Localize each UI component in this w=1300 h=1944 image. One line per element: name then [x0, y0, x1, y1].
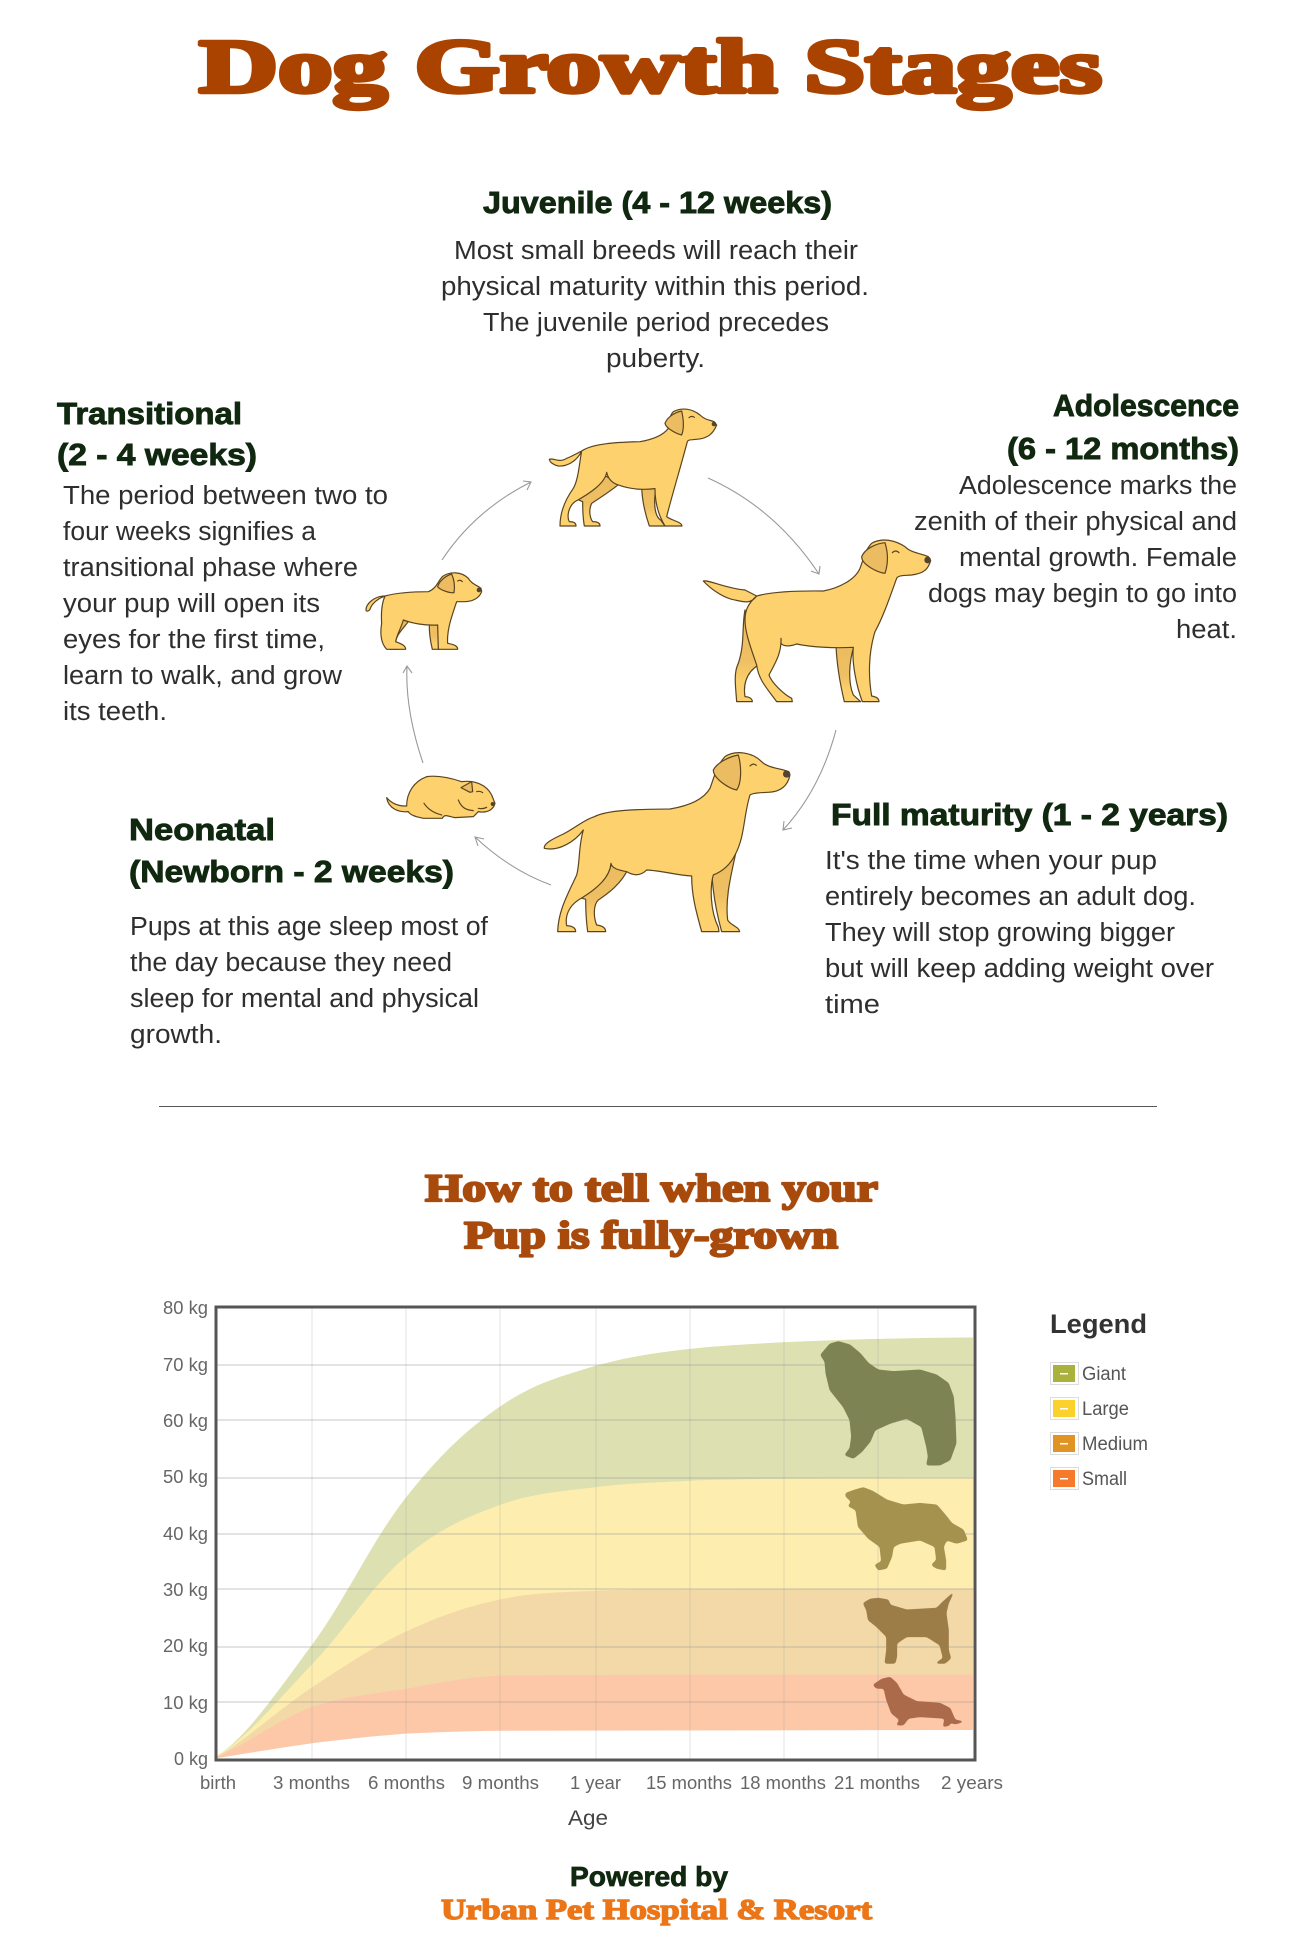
heading: transitional: Transitional — [57, 396, 242, 431]
text block: adolescence description: mental growth. Female — [959, 544, 1237, 572]
text block: juvenile description: physical maturity within this period. — [441, 273, 869, 301]
arrow: neonatal to transitional — [403, 666, 423, 763]
legend item: giant — [1050, 1362, 1127, 1385]
text block: juvenile description — [441, 237, 869, 373]
heading: juvenile: Juvenile (4 - 12 weeks) — [483, 185, 832, 220]
icon: small dog silhouette — [873, 1677, 963, 1727]
legend item: giant: Giant — [1082, 1364, 1127, 1385]
heading: transitional — [57, 396, 257, 472]
text block: adolescence description: dogs may begin to go into — [928, 580, 1237, 608]
icon: transitional puppy — [366, 573, 482, 649]
powered by: Powered by — [570, 1861, 728, 1892]
icon: adult dog — [544, 753, 790, 932]
text block: neonatal description — [130, 913, 489, 1049]
arrow: transitional to juvenile — [442, 481, 531, 560]
text block: neonatal description: Pups at this age sleep most of — [130, 913, 489, 941]
text block: full maturity description: time — [825, 991, 880, 1019]
legend title: Legend — [1050, 1309, 1147, 1339]
x axis labels: 6 months — [368, 1773, 445, 1793]
legend item: medium: Medium — [1082, 1434, 1148, 1455]
x axis title: Age — [568, 1807, 608, 1830]
x axis labels: 2 years — [941, 1773, 1003, 1793]
x axis labels — [200, 1773, 1003, 1793]
text block: juvenile description: puberty. — [606, 345, 705, 373]
heading: full maturity: Full maturity (1 - 2 years) — [831, 797, 1228, 832]
y axis labels — [163, 1298, 208, 1769]
heading: how to tell when your pup is fully-grown: Pup is fully-grown — [464, 1214, 838, 1257]
y axis labels: 80 kg — [163, 1298, 208, 1318]
text block: transitional description: its teeth. — [63, 698, 167, 726]
x axis labels: birth — [200, 1773, 236, 1793]
heading: neonatal: (Newborn - 2 weeks) — [129, 854, 454, 889]
heading: how to tell when your pup is fully-grown — [425, 1167, 878, 1257]
text block: adolescence description: zenith of their physical and — [914, 508, 1237, 536]
panel: full maturity stage text — [825, 797, 1228, 1019]
icon: neonatal puppy — [387, 776, 495, 818]
title: Dog Growth Stages — [199, 25, 1102, 109]
heading: adolescence: Adolescence — [1053, 388, 1239, 423]
panel: adolescence stage text — [914, 388, 1239, 644]
text block: full maturity description: It's the time when your pup — [825, 847, 1157, 875]
text block: adolescence description: heat. — [1176, 616, 1237, 644]
y axis labels: 70 kg — [163, 1355, 208, 1375]
y axis labels: 10 kg — [163, 1693, 208, 1713]
legend item: small: Small — [1082, 1469, 1127, 1490]
text block: adolescence description: Adolescence marks the — [959, 472, 1237, 500]
icon: adolescent dog — [703, 540, 931, 702]
y axis labels: 60 kg — [163, 1411, 208, 1431]
heading: neonatal: Neonatal — [129, 812, 275, 847]
legend — [1050, 1309, 1148, 1490]
y axis labels: 50 kg — [163, 1467, 208, 1487]
x axis labels: 3 months — [273, 1773, 350, 1793]
chart area bands — [214, 1337, 973, 1759]
divider — [159, 1106, 1157, 1108]
text block: neonatal description: the day because they need — [130, 949, 452, 977]
legend item: small — [1050, 1468, 1127, 1490]
heading: transitional: (2 - 4 weeks) — [57, 437, 257, 472]
y axis labels: 30 kg — [163, 1580, 208, 1600]
heading: how to tell when your pup is fully-grown: How to tell when your — [425, 1167, 878, 1210]
legend item: medium — [1050, 1432, 1148, 1455]
text block: juvenile description: Most small breeds will reach their — [454, 237, 859, 265]
icon: medium dog silhouette — [863, 1593, 953, 1663]
panel: transitional stage text — [57, 396, 388, 726]
heading: adolescence — [1007, 388, 1239, 466]
y axis labels: 40 kg — [163, 1524, 208, 1544]
text block: full maturity description: They will stop growing bigger — [825, 919, 1176, 947]
x axis labels: 18 months — [740, 1773, 826, 1793]
icon: giant dog silhouette — [821, 1342, 956, 1465]
text block: transitional description: eyes for the first time, — [63, 626, 325, 654]
text block: adolescence description — [914, 472, 1237, 644]
arrow: adolescence to full maturity — [783, 730, 836, 830]
text block: transitional description: your pup will open its — [63, 590, 320, 618]
x axis labels: 15 months — [646, 1773, 732, 1793]
text block: full maturity description: but will keep adding weight over — [825, 955, 1215, 983]
x axis labels: 9 months — [462, 1773, 539, 1793]
legend item: large: Large — [1082, 1399, 1129, 1420]
text block: transitional description: The period between two to — [63, 482, 388, 510]
plot frame — [216, 1307, 975, 1760]
footer — [441, 1861, 872, 1926]
panel: juvenile stage text — [441, 185, 869, 373]
text block: transitional description: learn to walk, and grow — [63, 662, 343, 690]
panel: neonatal stage text — [129, 812, 489, 1049]
text block: transitional description: four weeks signifies a — [63, 518, 317, 546]
heading: adolescence: (6 - 12 months) — [1007, 431, 1239, 466]
text block: transitional description: transitional phase where — [63, 554, 358, 582]
x axis labels: 1 year — [570, 1773, 621, 1793]
text block: neonatal description: growth. — [130, 1021, 222, 1049]
x axis labels: 21 months — [834, 1773, 920, 1793]
heading: neonatal — [129, 812, 454, 889]
text block: full maturity description: entirely becomes an adult dog. — [825, 883, 1196, 911]
arrow: juvenile to adolescence — [708, 478, 820, 574]
gridlines — [215, 1306, 975, 1760]
icon: juvenile dog — [549, 409, 717, 526]
y axis labels: 20 kg — [163, 1636, 208, 1656]
text block: juvenile description: The juvenile period precedes — [483, 309, 829, 337]
y axis labels: 0 kg — [174, 1749, 208, 1769]
text block: full maturity description — [825, 847, 1215, 1019]
chart: dog weight by age — [163, 1298, 1003, 1830]
text block: neonatal description: sleep for mental and physical — [130, 985, 479, 1013]
icon: large dog silhouette — [846, 1488, 967, 1570]
arrow: full maturity to neonatal — [475, 837, 551, 885]
text block: transitional description — [63, 482, 388, 726]
legend item: large — [1050, 1398, 1129, 1420]
hospital name: Urban Pet Hospital & Resort — [441, 1894, 872, 1926]
